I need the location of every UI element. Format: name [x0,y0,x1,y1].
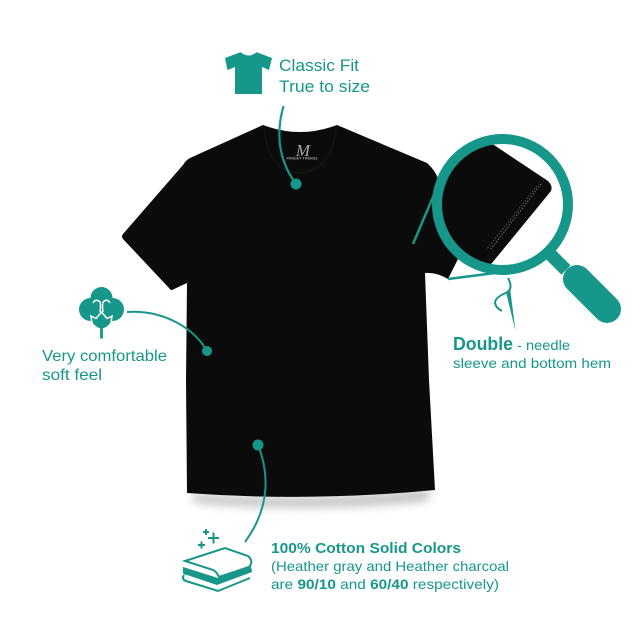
text: double needle: - needle [517,337,570,353]
icon: folded fabric stack [183,529,252,591]
heading: classic fit: True to size [279,77,370,96]
text: double needle: Double [453,333,513,354]
text: cotton details [271,541,509,592]
neck label logo: PANDEY TRENDZ [286,156,318,160]
text: double needle [453,333,611,371]
text: very comfortable: Very comfortable [42,348,167,365]
handle [550,254,566,270]
neck label logo: M [295,141,311,160]
leader line: fabric [245,440,266,542]
collar back [264,127,336,173]
text: cotton details: 100% Cotton Solid Colors [271,541,461,557]
icon: classic t-shirt [225,52,272,94]
text: double needle: sleeve and bottom hem [453,355,611,371]
leader line: classic fit [279,106,302,190]
icon: cotton flower [79,287,124,338]
text: cotton details: (Heather gray and Heather charcoal [271,558,509,574]
black t-shirt [122,125,470,497]
leader lines [413,190,436,244]
leader line: comfort [127,312,212,356]
neck label logo [286,141,318,160]
icon: needle and thread [495,278,516,331]
ring [437,139,568,270]
text: cotton details: are 90/10 and 60/40 respectively) [271,576,499,592]
text: very comfortable [42,348,167,384]
magnifier [413,130,607,309]
heading: classic fit [279,56,370,96]
shirt shadow [192,490,430,507]
heading: classic fit: Classic Fit [279,56,359,75]
lens with sleeve [440,142,564,266]
text: very comfortable: soft feel [42,367,102,384]
